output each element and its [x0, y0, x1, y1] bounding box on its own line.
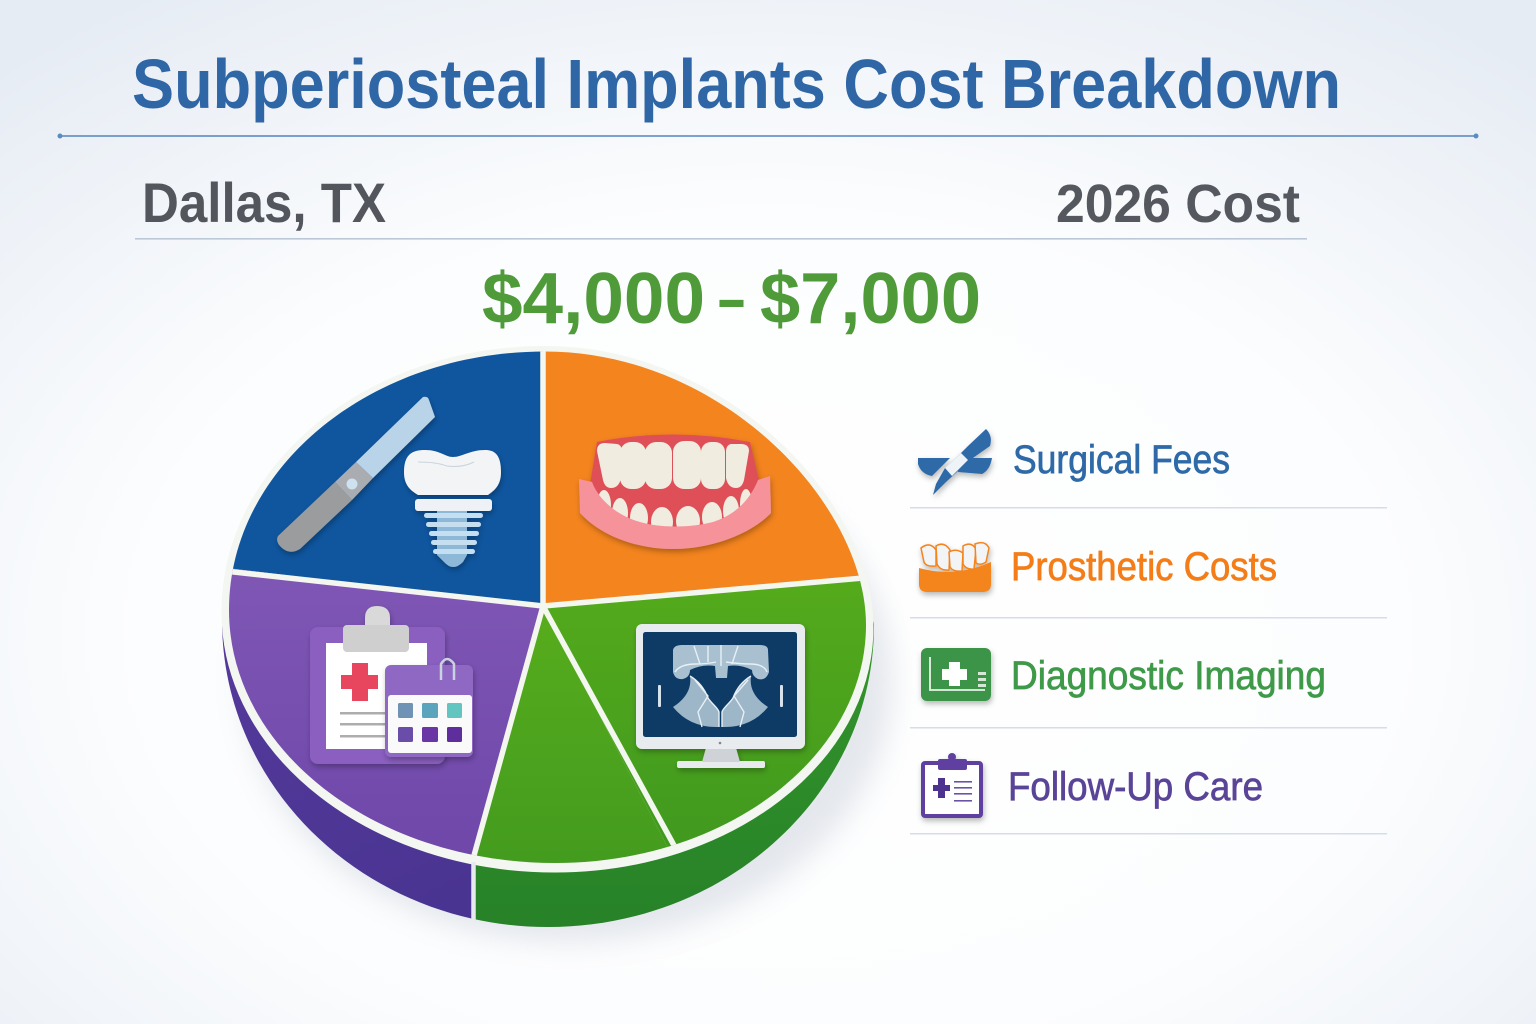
- icon: x-ray monitor: [636, 624, 805, 768]
- year label: 2026 Cost: [1056, 174, 1300, 234]
- legend label: Prosthetic Costs: [1011, 545, 1277, 589]
- slice: surgical fees: [233, 352, 543, 603]
- legend item: surgical fees: [918, 429, 1230, 495]
- price range: [482, 259, 981, 339]
- pie rim: [229, 354, 866, 865]
- icon: medical clipboard: [923, 753, 981, 816]
- slice: prosthetic costs: [543, 352, 859, 603]
- pie side: purple: [222, 626, 472, 918]
- location label: Dallas, TX: [142, 171, 386, 234]
- icon: scalpel: [277, 397, 435, 552]
- icon: imaging card: [921, 648, 991, 701]
- icon: scalpel tray: [918, 429, 992, 495]
- pie slices: [229, 352, 866, 863]
- legend item: follow-up care: [923, 753, 1263, 816]
- icon: denture block: [919, 543, 991, 592]
- legend label: Surgical Fees: [1013, 438, 1230, 482]
- slice: diagnostic imaging lower: [472, 613, 668, 863]
- icon: dentures: [579, 434, 771, 549]
- price range: –: [718, 259, 745, 339]
- pie side: green: [476, 620, 874, 927]
- legend label: Follow-Up Care: [1008, 765, 1263, 809]
- legend item: diagnostic imaging: [921, 648, 1326, 701]
- icon: calendar: [385, 659, 473, 757]
- title: Subperiosteal Implants Cost Breakdown: [132, 45, 1341, 123]
- pie chart: [222, 346, 899, 948]
- legend: [910, 429, 1387, 834]
- price range: $4,000: [482, 259, 705, 339]
- legend label: Diagnostic Imaging: [1011, 654, 1326, 698]
- slice: follow-up care: [229, 568, 540, 855]
- slice: diagnostic imaging: [547, 578, 866, 847]
- price range: $7,000: [760, 259, 981, 339]
- icon: clipboard: [310, 606, 445, 764]
- legend item: prosthetic costs: [919, 543, 1277, 592]
- icon: dental implant: [404, 450, 501, 567]
